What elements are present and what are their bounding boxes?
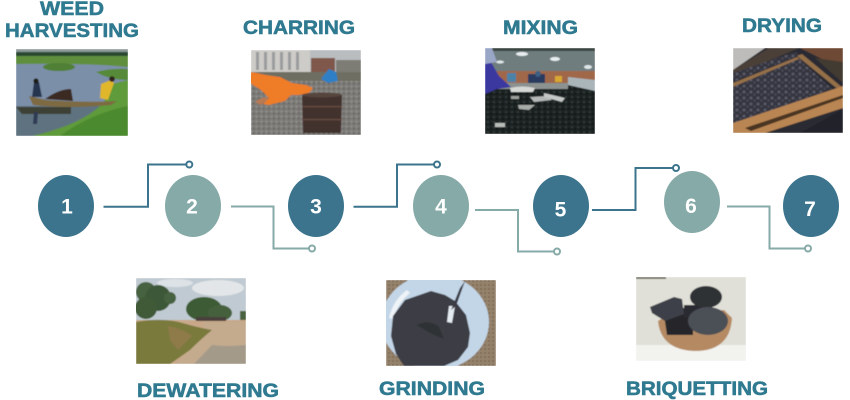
connector from step 6: [727, 206, 811, 252]
step 4: [413, 175, 469, 237]
connector from step 3: [354, 162, 440, 207]
photo: dewatering: [135, 278, 246, 364]
photo: charring: [246, 50, 361, 135]
connector from step 4: [475, 210, 560, 254]
step 1: 1: [61, 196, 73, 218]
step 5: [533, 175, 589, 237]
step 2: 2: [186, 196, 198, 218]
step 3: [288, 175, 344, 237]
step 7: 7: [804, 198, 816, 221]
connector from step 5: [592, 165, 679, 210]
heading: drying: DRYING: [742, 16, 822, 37]
connector from step 1: [104, 162, 192, 207]
step 6: [664, 171, 720, 233]
step 6: 6: [685, 195, 697, 218]
heading: weed harvesting: HARVESTING: [5, 21, 139, 42]
heading: weed harvesting: [5, 0, 139, 42]
step 5: 5: [555, 198, 567, 222]
step 3: 3: [310, 196, 322, 218]
connector from step 2: [231, 206, 315, 252]
heading: charring: CHARRING: [243, 18, 355, 39]
heading: briquetting: BRIQUETTING: [626, 379, 768, 400]
step 2: [165, 175, 221, 237]
step 7: [783, 175, 839, 237]
photo: weed harvesting: [16, 49, 128, 136]
heading: mixing: MIXING: [503, 18, 578, 39]
heading: grinding: GRINDING: [379, 379, 485, 400]
step 4: 4: [435, 196, 447, 218]
photo: grinding: [386, 280, 496, 366]
photo: drying: [733, 48, 843, 133]
photo: briquetting: [636, 277, 746, 361]
step 1: [38, 175, 94, 237]
photo: mixing: [485, 48, 595, 134]
